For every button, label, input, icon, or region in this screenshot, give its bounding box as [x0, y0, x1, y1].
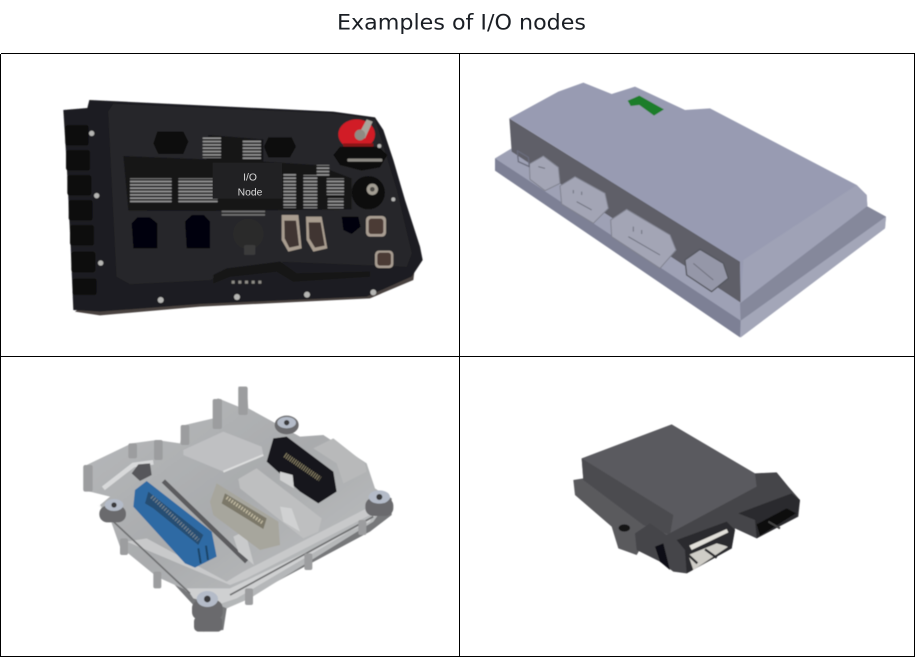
right port	[738, 493, 800, 538]
trench beside blue connector	[163, 481, 247, 562]
cover block	[238, 468, 322, 538]
label: I/O Node	[213, 163, 282, 199]
left port	[677, 522, 735, 573]
panel: black I/O node with label	[63, 100, 423, 315]
panel: grey 3D CAD I/O node	[495, 83, 886, 337]
label: I/O Node: I/O	[243, 173, 257, 184]
grey connector	[210, 483, 280, 550]
panel: aluminium ECU with blue connector	[83, 387, 393, 632]
rubber mounts	[99, 416, 393, 632]
panel: dark grey sealed I/O node	[573, 424, 800, 573]
title: Examples of I/O nodes	[337, 10, 586, 34]
blue connector	[133, 481, 217, 568]
black connector	[267, 437, 337, 503]
label: I/O Node: Node	[238, 187, 263, 198]
